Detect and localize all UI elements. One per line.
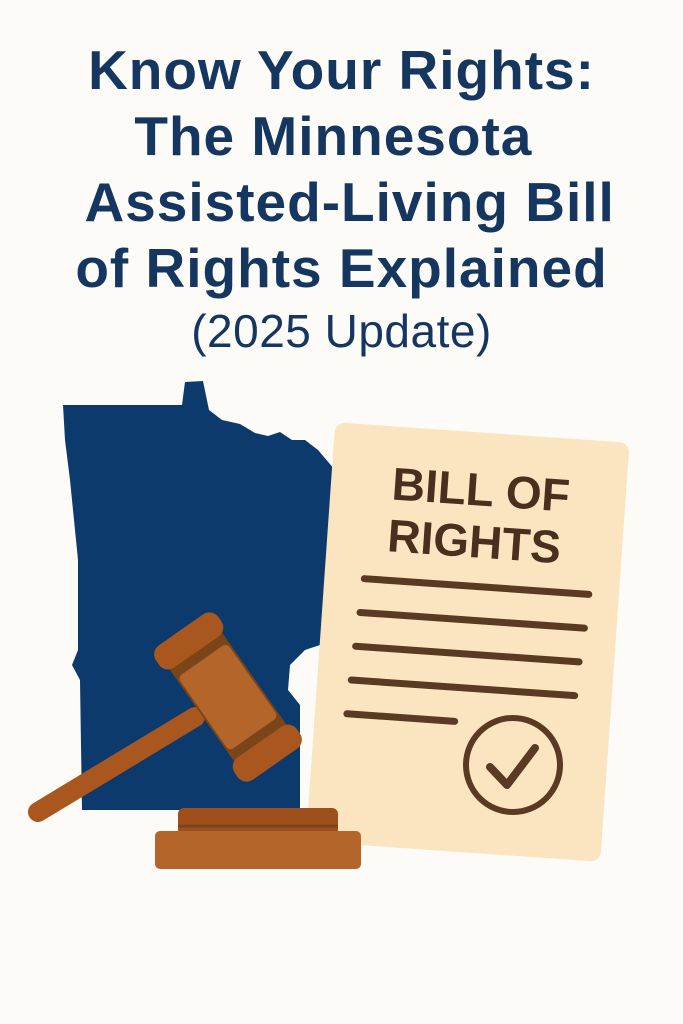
document: bill of rights (306, 422, 629, 862)
title: Assisted-Living Bill (84, 171, 615, 233)
subtitle: (2025 Update) (191, 305, 492, 357)
title (75, 39, 615, 299)
map: minnesota (63, 381, 335, 810)
document heading: BILL OF (390, 457, 571, 522)
title: The Minnesota (134, 105, 532, 167)
title: Know Your Rights: (88, 39, 595, 101)
title: of Rights Explained (75, 237, 608, 299)
icon: check circle (466, 718, 560, 812)
document: bill of rights: RIGHTS (386, 509, 563, 573)
icon: gavel (38, 608, 361, 869)
